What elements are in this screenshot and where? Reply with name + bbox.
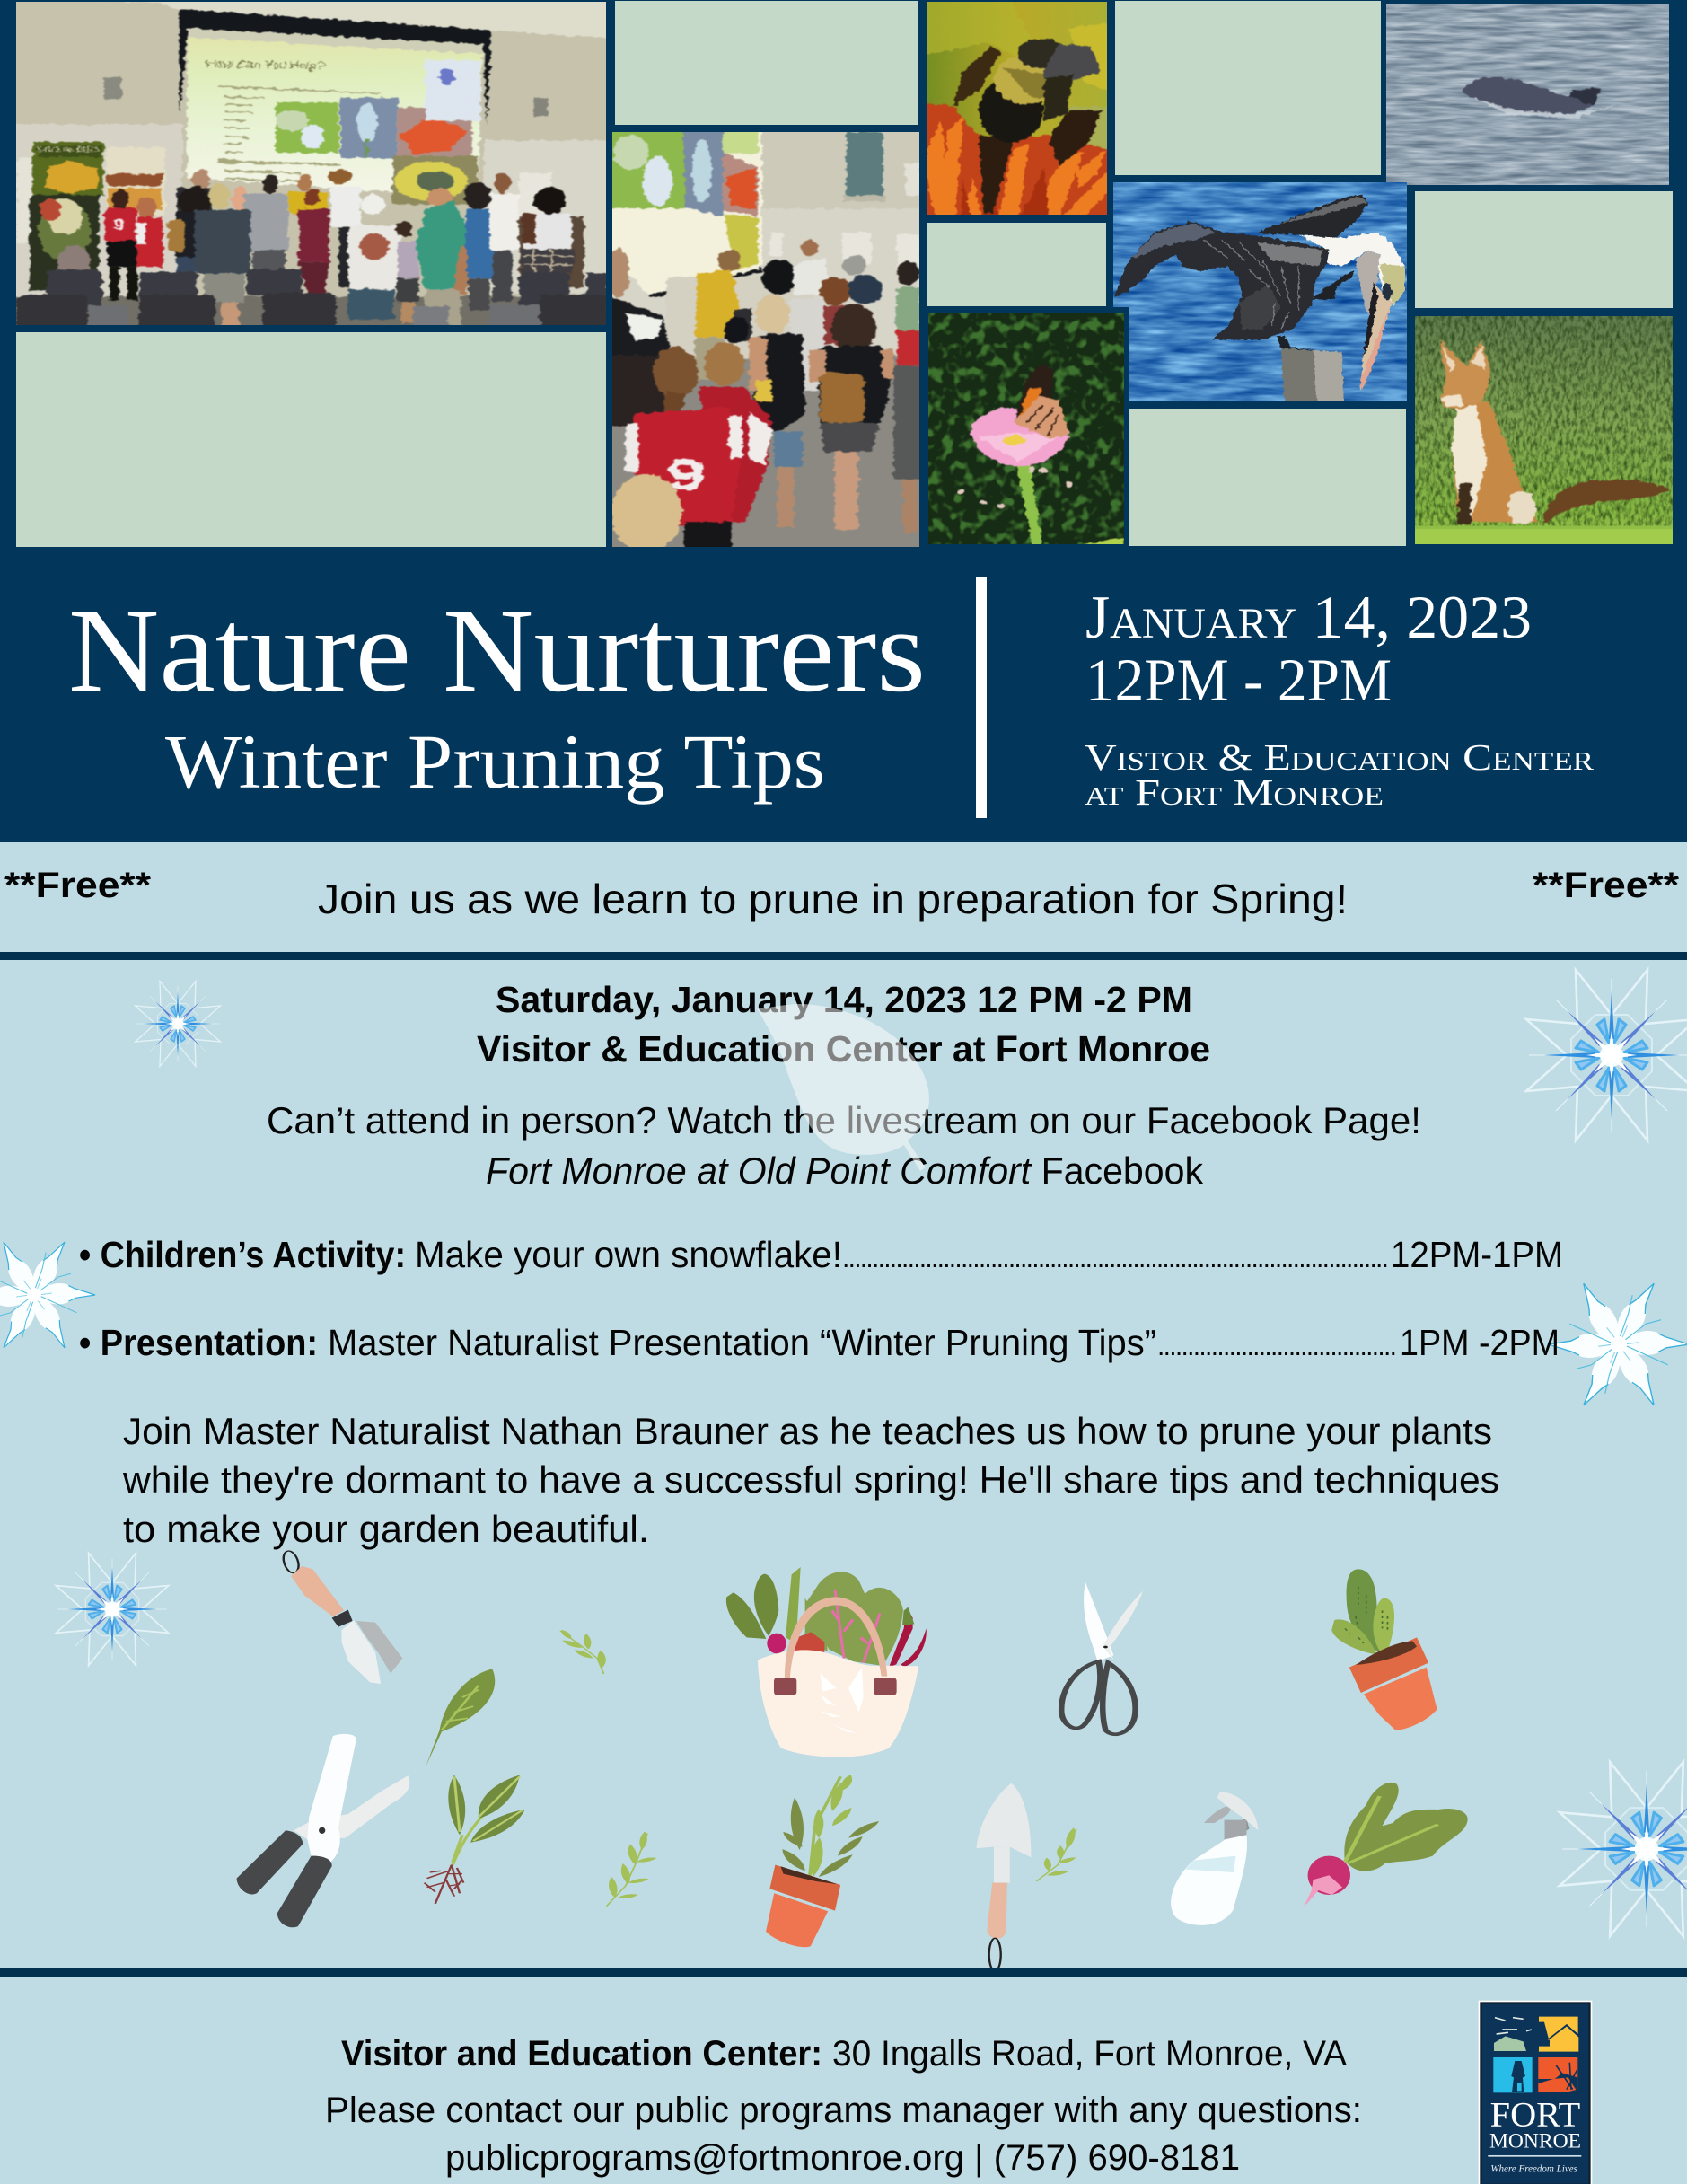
- icon: potted cactus: [1331, 1569, 1437, 1730]
- icon: translucent leaf over text: [757, 1004, 929, 1171]
- venue line: Visitor & Education Center at Fort Monroe: [477, 1028, 1210, 1070]
- logo: Fort Monroe: Where Freedom Lives: [1490, 2162, 1577, 2174]
- photo: presentation room with audience: [0, 0, 619, 332]
- photo: crowd in front of screen: [604, 128, 926, 552]
- green tile 5: [1129, 409, 1406, 546]
- livestream line: Can’t attend in person? Watch the livestream on our Facebook Page!: [267, 1099, 1421, 1141]
- green tile 2: [615, 1, 918, 125]
- date: January 14, 2023: [1085, 583, 1532, 651]
- icon: terracotta pot with plant: [766, 1774, 883, 1947]
- illustrations: left side: [237, 1551, 883, 1947]
- photo: dolphin in water: [1386, 4, 1669, 185]
- children's activity time: 12PM-1PM: [1391, 1234, 1563, 1275]
- divider above footer: [0, 1968, 1687, 1977]
- description paragraph: to make your garden beautiful.: [123, 1508, 649, 1550]
- children's activity description: Make your own snowflake!: [415, 1234, 842, 1275]
- email and phone: publicprograms@fortmonroe.org | (757) 690-8181: [445, 2138, 1240, 2178]
- snowflake middle left: [56, 1553, 169, 1666]
- icon: trowel: [976, 1783, 1031, 1971]
- logo: Fort Monroe: MONROE: [1489, 2129, 1581, 2153]
- green tile 6: [1415, 191, 1673, 308]
- presentation time: 1PM -2PM: [1400, 1322, 1560, 1363]
- time: 12PM - 2PM: [1085, 646, 1392, 714]
- green tile 3: [1115, 1, 1381, 175]
- title block: [68, 584, 926, 805]
- event details: [267, 979, 1421, 1192]
- venue line 2: at Fort Monroe: [1085, 771, 1384, 813]
- logo: Fort Monroe: FORT: [1490, 2096, 1580, 2134]
- contact line: Please contact our public programs manager with any questions:: [325, 2091, 1362, 2130]
- star snowflake left: [0, 1237, 95, 1353]
- snowflake top left: [135, 981, 221, 1067]
- icon: sprig bottom: [607, 1831, 658, 1907]
- page light-blue background: [0, 842, 1687, 2184]
- photo: red fox sitting in grass: [1411, 313, 1678, 547]
- date, time and venue: [1085, 583, 1595, 813]
- photo: presentation room with audience: 9: [112, 216, 126, 233]
- footer contact block: [325, 2034, 1362, 2178]
- description paragraph: while they're dormant to have a successful spring! He'll share tips and techniques: [122, 1458, 1499, 1501]
- photo: pelican on post: [1113, 180, 1412, 407]
- dot leader 2: ........................................: [1157, 1332, 1397, 1361]
- green tile 4: [927, 223, 1106, 306]
- children's activity label: • Children’s Activity:: [79, 1234, 406, 1275]
- subtitle: Winter Pruning Tips: Winter Pruning Tips: [165, 718, 825, 805]
- snowflake top right: [1526, 970, 1687, 1140]
- address: 30 Ingalls Road, Fort Monroe, VA: [832, 2034, 1347, 2074]
- title: Nature Nurturers: Nature Nurturers: [68, 584, 926, 717]
- vertical divider bar: [976, 577, 987, 818]
- photo: presentation room with audience: How Can You Help?: [206, 57, 325, 72]
- icon: sprig top: [558, 1629, 607, 1674]
- logo: Fort Monroe: [1479, 2001, 1592, 2184]
- presentation label: • Presentation:: [79, 1322, 318, 1363]
- photo: monarch butterfly on pink zinnia: [923, 309, 1129, 550]
- icon: pruning shears: [237, 1734, 409, 1927]
- dot leader 1: ............................................................................................: [842, 1244, 1389, 1273]
- photo: presentation room with audience: SAVE the BEES: [37, 146, 99, 154]
- icon: single leaf: [426, 1669, 495, 1766]
- venue line 1: Vistor & Education Center: [1085, 736, 1595, 778]
- banner sentence: Join us as we learn to prune in preparation for Spring!: [318, 876, 1348, 922]
- presentation description: Master Naturalist Presentation “Winter Pruning Tips”: [328, 1322, 1156, 1363]
- illustrations: right side: [976, 1569, 1468, 1971]
- date line: Saturday, January 14, 2023 12 PM -2 PM: [496, 979, 1192, 1020]
- header navy background: [0, 0, 1687, 842]
- icon: garden scissors: [1061, 1582, 1143, 1734]
- green tile 1: [16, 332, 606, 547]
- photo: bumblebee on orange flower: [927, 2, 1107, 215]
- snowflake bottom right: [1560, 1762, 1687, 1936]
- free tag right: **Free**: [1533, 866, 1679, 905]
- icon: spray bottle: [1171, 1792, 1258, 1925]
- icon: radish: [1304, 1783, 1468, 1907]
- free banner: [4, 866, 1679, 922]
- free tag left: **Free**: [4, 866, 151, 905]
- address label: Visitor and Education Center:: [341, 2034, 822, 2074]
- description paragraph: Join Master Naturalist Nathan Brauner as he teaches us how to prune your plants: [123, 1410, 1492, 1452]
- icon: sprig beside trowel: [1036, 1827, 1077, 1881]
- icon: tote bag with vegetables: [726, 1567, 927, 1757]
- photo collage: [0, 0, 1678, 552]
- facebook line: Fort Monroe at Old Point Comfort Facebook: [486, 1149, 1204, 1192]
- schedule: [79, 1234, 1563, 1363]
- icon: hand fork cultivator: [281, 1551, 402, 1684]
- photo: crowd in front of screen: 9: [666, 451, 706, 500]
- icon: seedling with roots: [425, 1775, 525, 1904]
- star snowflake right: [1549, 1277, 1687, 1412]
- description paragraph: [122, 1410, 1499, 1550]
